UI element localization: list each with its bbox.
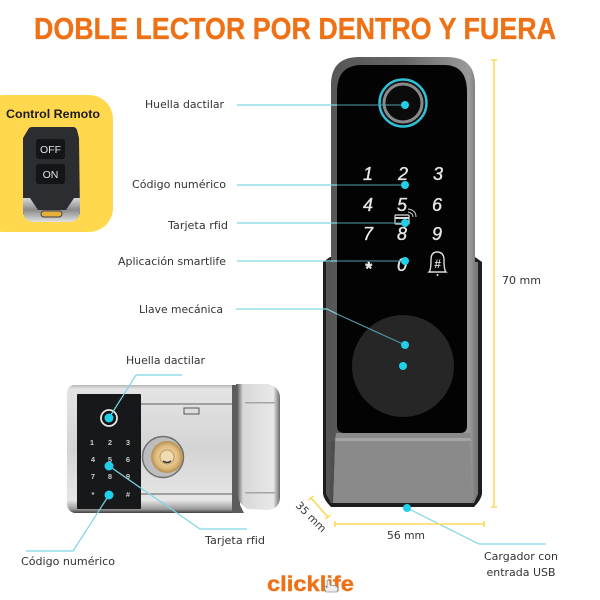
label: entrada usb: entrada USB [486,567,556,579]
panel: interior lock: 7 [91,472,95,481]
icon: bell: # [434,257,441,271]
label: cargador con entrada usb: Cargador con [484,551,558,563]
panel: interior lock: 6 [126,455,130,464]
panel: interior lock: 2 [108,438,112,447]
callout dots [104,101,411,512]
label: tarjeta rfid: Tarjeta rfid [167,220,228,232]
keypad: 4 [363,195,373,215]
keypad: 7 [363,224,374,244]
icon: hand cursor [324,580,338,592]
keypad: 9 [432,224,442,244]
label: 70 mm: 70 mm [502,275,541,287]
keypad: 0 [397,255,407,275]
panel: interior lock: # [126,490,131,499]
panel: interior lock: 4 [91,455,96,464]
bottom grey foot [333,433,472,503]
keypad [363,164,443,279]
panel: interior lock: 8 [108,472,112,481]
icon: fingerprint reader [380,80,426,126]
label: llave mecanica: Llave mecánica [139,304,223,316]
keypad: 2 [397,164,408,184]
logo: clicklife: clicklife [267,573,354,596]
keypad: 1 [363,164,373,184]
icon: remote control [23,127,80,222]
label: codigo numerico interior: Código numérico [21,556,115,568]
icon: key cylinder [142,436,184,478]
icon: rfid card [395,209,416,224]
panel: control remoto [0,95,113,232]
keypad: 5 [397,195,408,215]
callout lines: exterior [26,105,546,551]
panel: interior lock: * [92,490,95,499]
label: codigo numerico: Código numérico [132,179,226,191]
dimension lines [308,60,497,527]
keypad: 3 [433,164,443,184]
panel: interior lock [67,384,280,513]
label: 35 mm: 35 mm [293,500,328,535]
label: tarjeta rfid interior: Tarjeta rfid [204,535,265,547]
label: 56 mm: 56 mm [387,530,425,542]
panel: interior lock: 9 [126,472,130,481]
icon: remote control: OFF [40,144,61,156]
label: huella dactilar: Huella dactilar [145,99,225,111]
front frame [331,57,475,500]
panel: interior lock: 5 [108,455,112,464]
keypad: * [364,259,372,279]
rear housing [323,257,482,507]
panel: exterior lock device [323,57,482,507]
black face [337,65,467,433]
keypad panel [77,394,141,509]
panel: interior lock: 1 [90,438,94,447]
label: huella dactilar interior: Huella dactilar [126,355,206,367]
circle panel [352,315,454,417]
panel: interior lock: 3 [126,438,130,447]
icon: remote control: ON [43,169,58,181]
icon: bell [429,252,446,276]
keypad: 8 [397,224,407,244]
label: aplicacion smartlife: Aplicación smartlife [118,256,226,268]
heading: control remoto: Control Remoto [6,108,100,121]
keypad: 6 [432,195,443,215]
